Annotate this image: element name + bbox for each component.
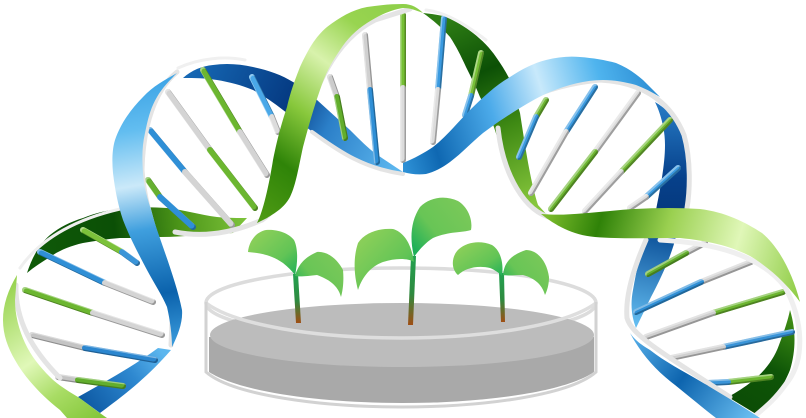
rungs: upper left turn xyxy=(150,70,278,225)
seedling: centre xyxy=(355,198,471,325)
dish front rim xyxy=(206,303,596,338)
ribbon: lower left green xyxy=(3,275,107,418)
dish back rim xyxy=(206,268,596,338)
rungs: top centre turn xyxy=(330,15,481,162)
seedling: right xyxy=(453,242,549,322)
agar top surface xyxy=(210,303,594,367)
dish outline xyxy=(206,302,596,407)
ribbon: lower right blue xyxy=(630,333,760,418)
rungs: left bottom turn xyxy=(25,180,193,386)
ribbon: centre blue xyxy=(403,57,660,174)
ribbon: left blue xyxy=(112,73,182,347)
ribbon: centre green xyxy=(257,4,423,223)
petri dish xyxy=(206,268,596,407)
ribbon: right green xyxy=(541,208,800,302)
rungs: upper right turn xyxy=(519,87,678,211)
dish wall and agar side xyxy=(209,337,594,403)
rungs: lower right turn xyxy=(636,243,792,383)
seedling: left xyxy=(248,230,343,323)
